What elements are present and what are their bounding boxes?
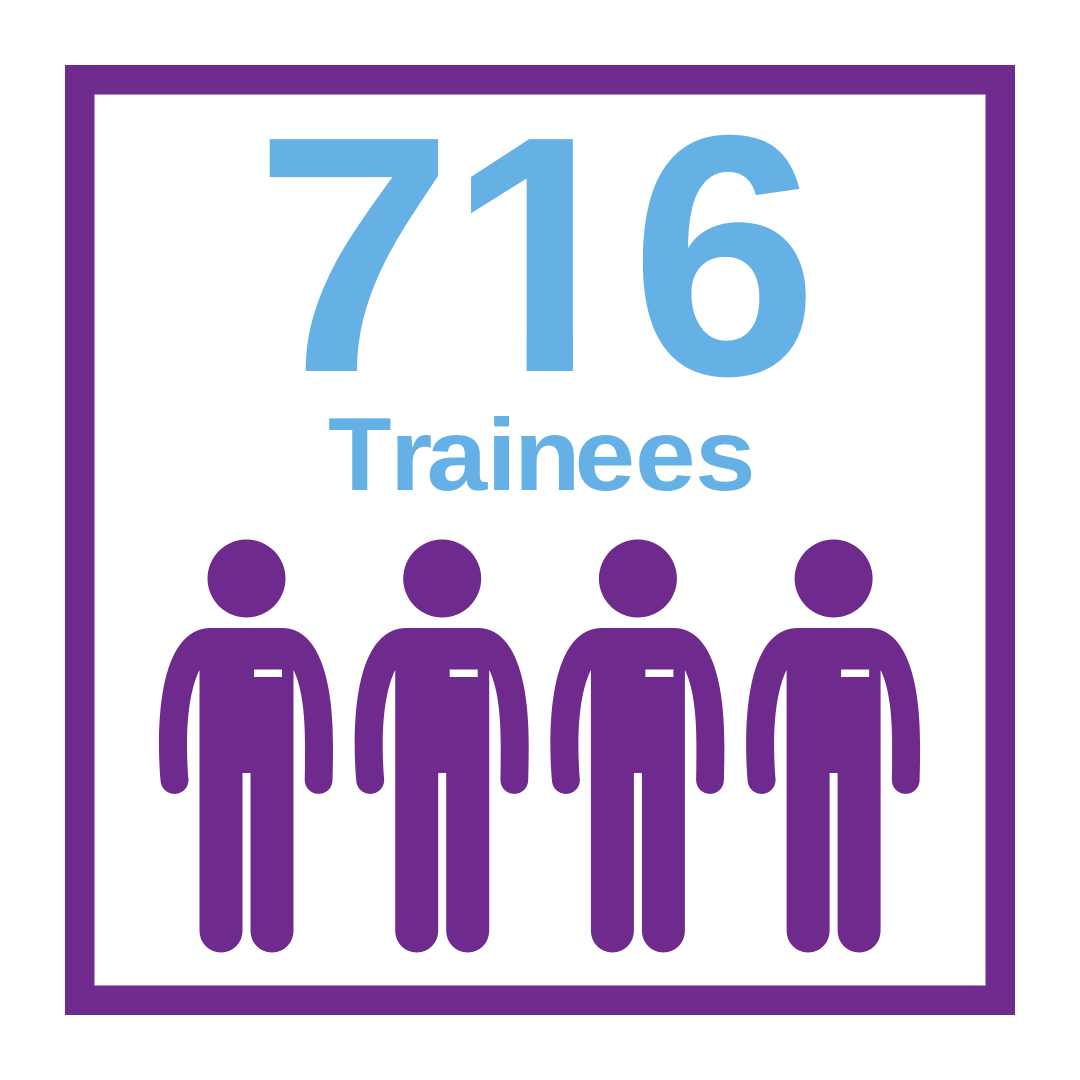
number: 716: 1	[448, 67, 635, 443]
heading: Trainees: rainees	[390, 398, 756, 512]
number: 716	[270, 134, 806, 378]
heading: Trainees: T	[328, 397, 392, 513]
number: 716: 7	[254, 66, 454, 443]
panel: purple square frame	[80, 80, 1000, 1000]
icon: trainee 2	[355, 540, 529, 952]
icon group: four trainees	[159, 540, 920, 952]
icon: trainee 4	[746, 540, 920, 952]
icon: trainee 3	[550, 540, 724, 952]
icon: trainee 1	[159, 540, 333, 952]
number: 716: 6	[630, 64, 818, 448]
